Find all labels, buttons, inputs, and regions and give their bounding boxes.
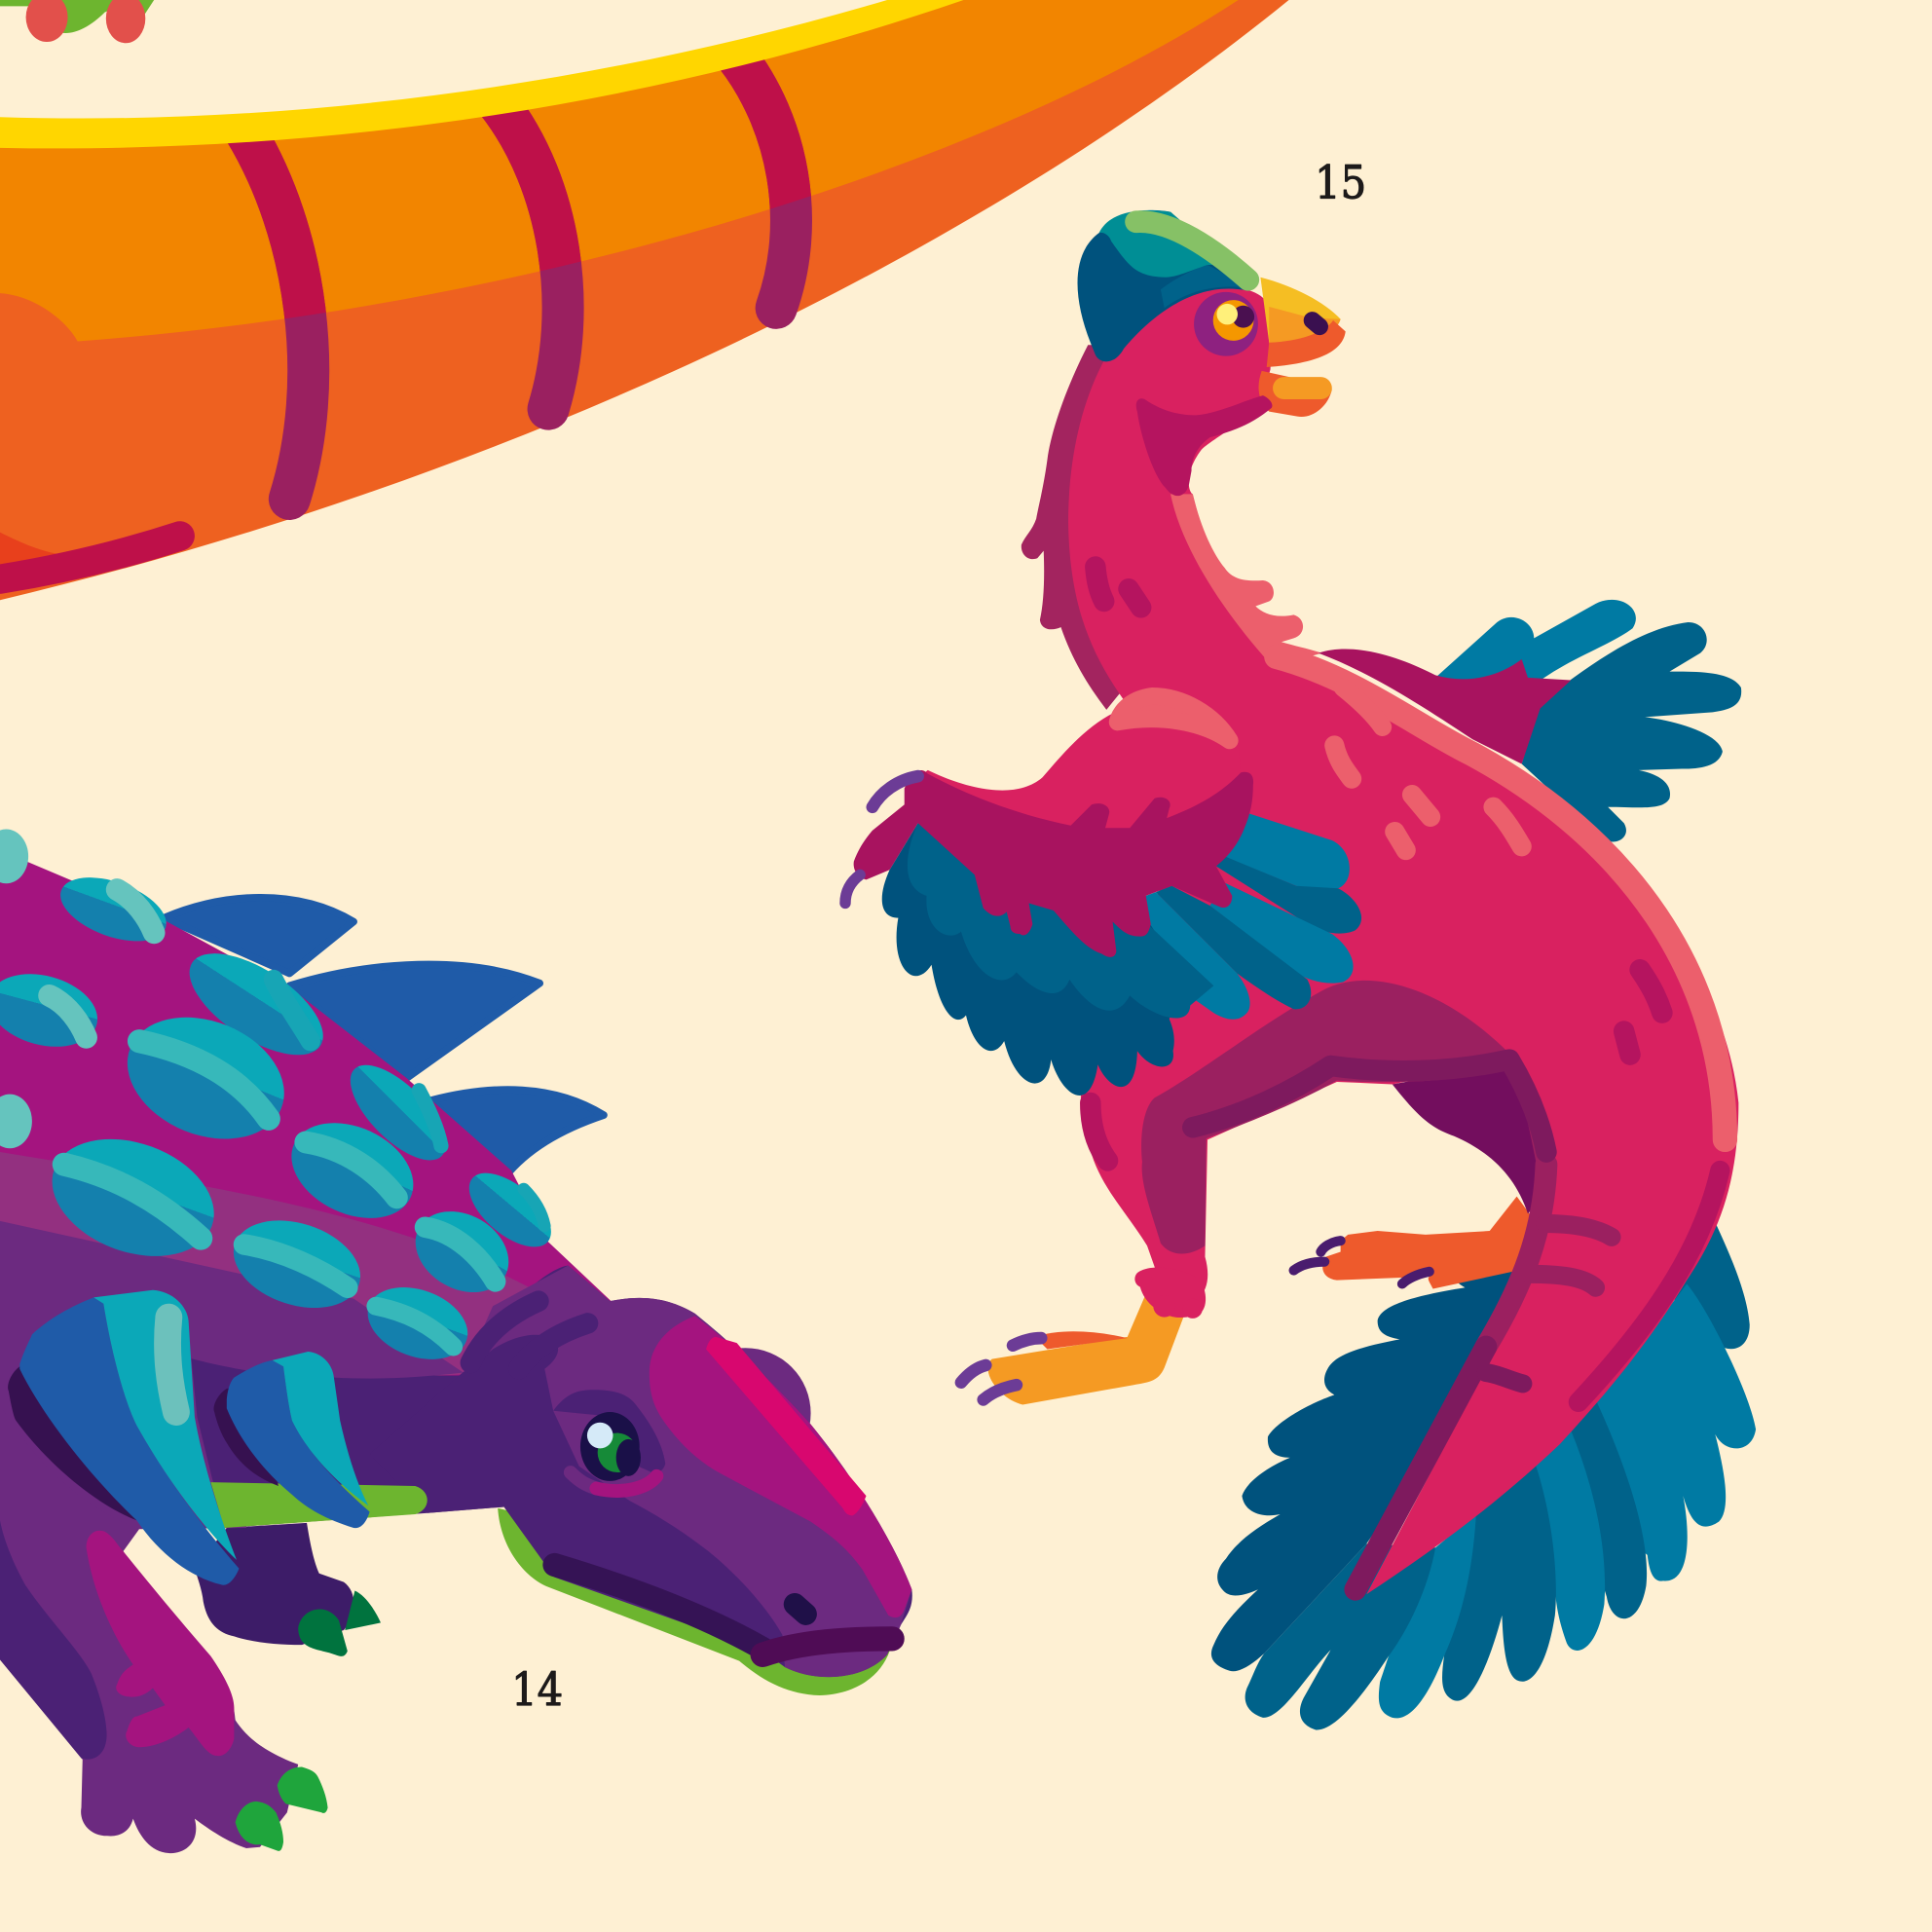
- body upper magenta: [0, 850, 613, 1376]
- tail dark orange underside: [0, 0, 1289, 600]
- wing feathers teal: [1223, 813, 1350, 889]
- back spikes: [164, 898, 604, 1176]
- foot of dinosaur above: [0, 0, 154, 43]
- plate shadow: [8, 1366, 136, 1520]
- panel: feathered dinosaur 15: [845, 210, 1756, 1730]
- leg claws: [278, 1766, 328, 1813]
- eye: [1194, 292, 1258, 356]
- back shoulder frill: [1319, 649, 1571, 763]
- tail orange upper side: [0, 0, 1239, 341]
- label: number 14: 14: [511, 1664, 563, 1717]
- far rear leg: [195, 1523, 353, 1645]
- light throat band: [1170, 494, 1322, 667]
- plate 1 teal: [93, 1290, 237, 1560]
- body left purple: [0, 1220, 246, 1529]
- wing pink forearm: [905, 712, 1245, 837]
- near wing: [845, 696, 1361, 1096]
- head: [680, 1348, 811, 1478]
- neck green stripe: [210, 1482, 427, 1528]
- label: number 15: 15: [1315, 158, 1366, 210]
- tail feathers dark: [1211, 1241, 1528, 1671]
- near foot: [988, 1294, 1185, 1404]
- tail stripes: [244, 56, 791, 499]
- body spots: [1334, 746, 1522, 850]
- neck armour plates: [8, 1290, 370, 1585]
- tail spine band: [1486, 1165, 1546, 1347]
- mouth interior: [1136, 395, 1272, 496]
- panel: long tail of dinosaur above: [0, 0, 1289, 600]
- crest: [1078, 210, 1252, 361]
- wing magenta arm: [854, 770, 1253, 957]
- tail lower red stripe: [0, 533, 61, 570]
- plate 1 blue: [19, 1297, 239, 1585]
- far leg and foot: [1322, 1197, 1534, 1289]
- beak: [1260, 278, 1341, 343]
- mouth lines: [554, 1565, 762, 1649]
- near front leg: [0, 1404, 328, 1853]
- snout magenta: [650, 1316, 911, 1617]
- back feathers: [1435, 600, 1741, 841]
- neck: [189, 1331, 548, 1528]
- leg magenta highlight: [87, 1531, 234, 1756]
- light back outline: [1277, 656, 1725, 1139]
- lower tail edge band: [1579, 1170, 1720, 1402]
- wing feathers dark: [882, 823, 1183, 1096]
- dark neck back: [1022, 345, 1183, 710]
- tail feathers light and mid: [1245, 1222, 1756, 1730]
- jaw green edge: [498, 1508, 890, 1695]
- far thigh: [1393, 1059, 1555, 1213]
- panel: armoured dinosaur 14: [0, 830, 912, 1853]
- eye: [553, 1390, 665, 1473]
- tail yellow dorsal band: [0, 0, 963, 148]
- thigh and near leg: [1141, 981, 1555, 1253]
- osteoderm scales: [0, 830, 564, 1372]
- main body: [1068, 288, 1738, 1594]
- plate 2: [214, 1386, 279, 1486]
- neck folds: [470, 1301, 588, 1369]
